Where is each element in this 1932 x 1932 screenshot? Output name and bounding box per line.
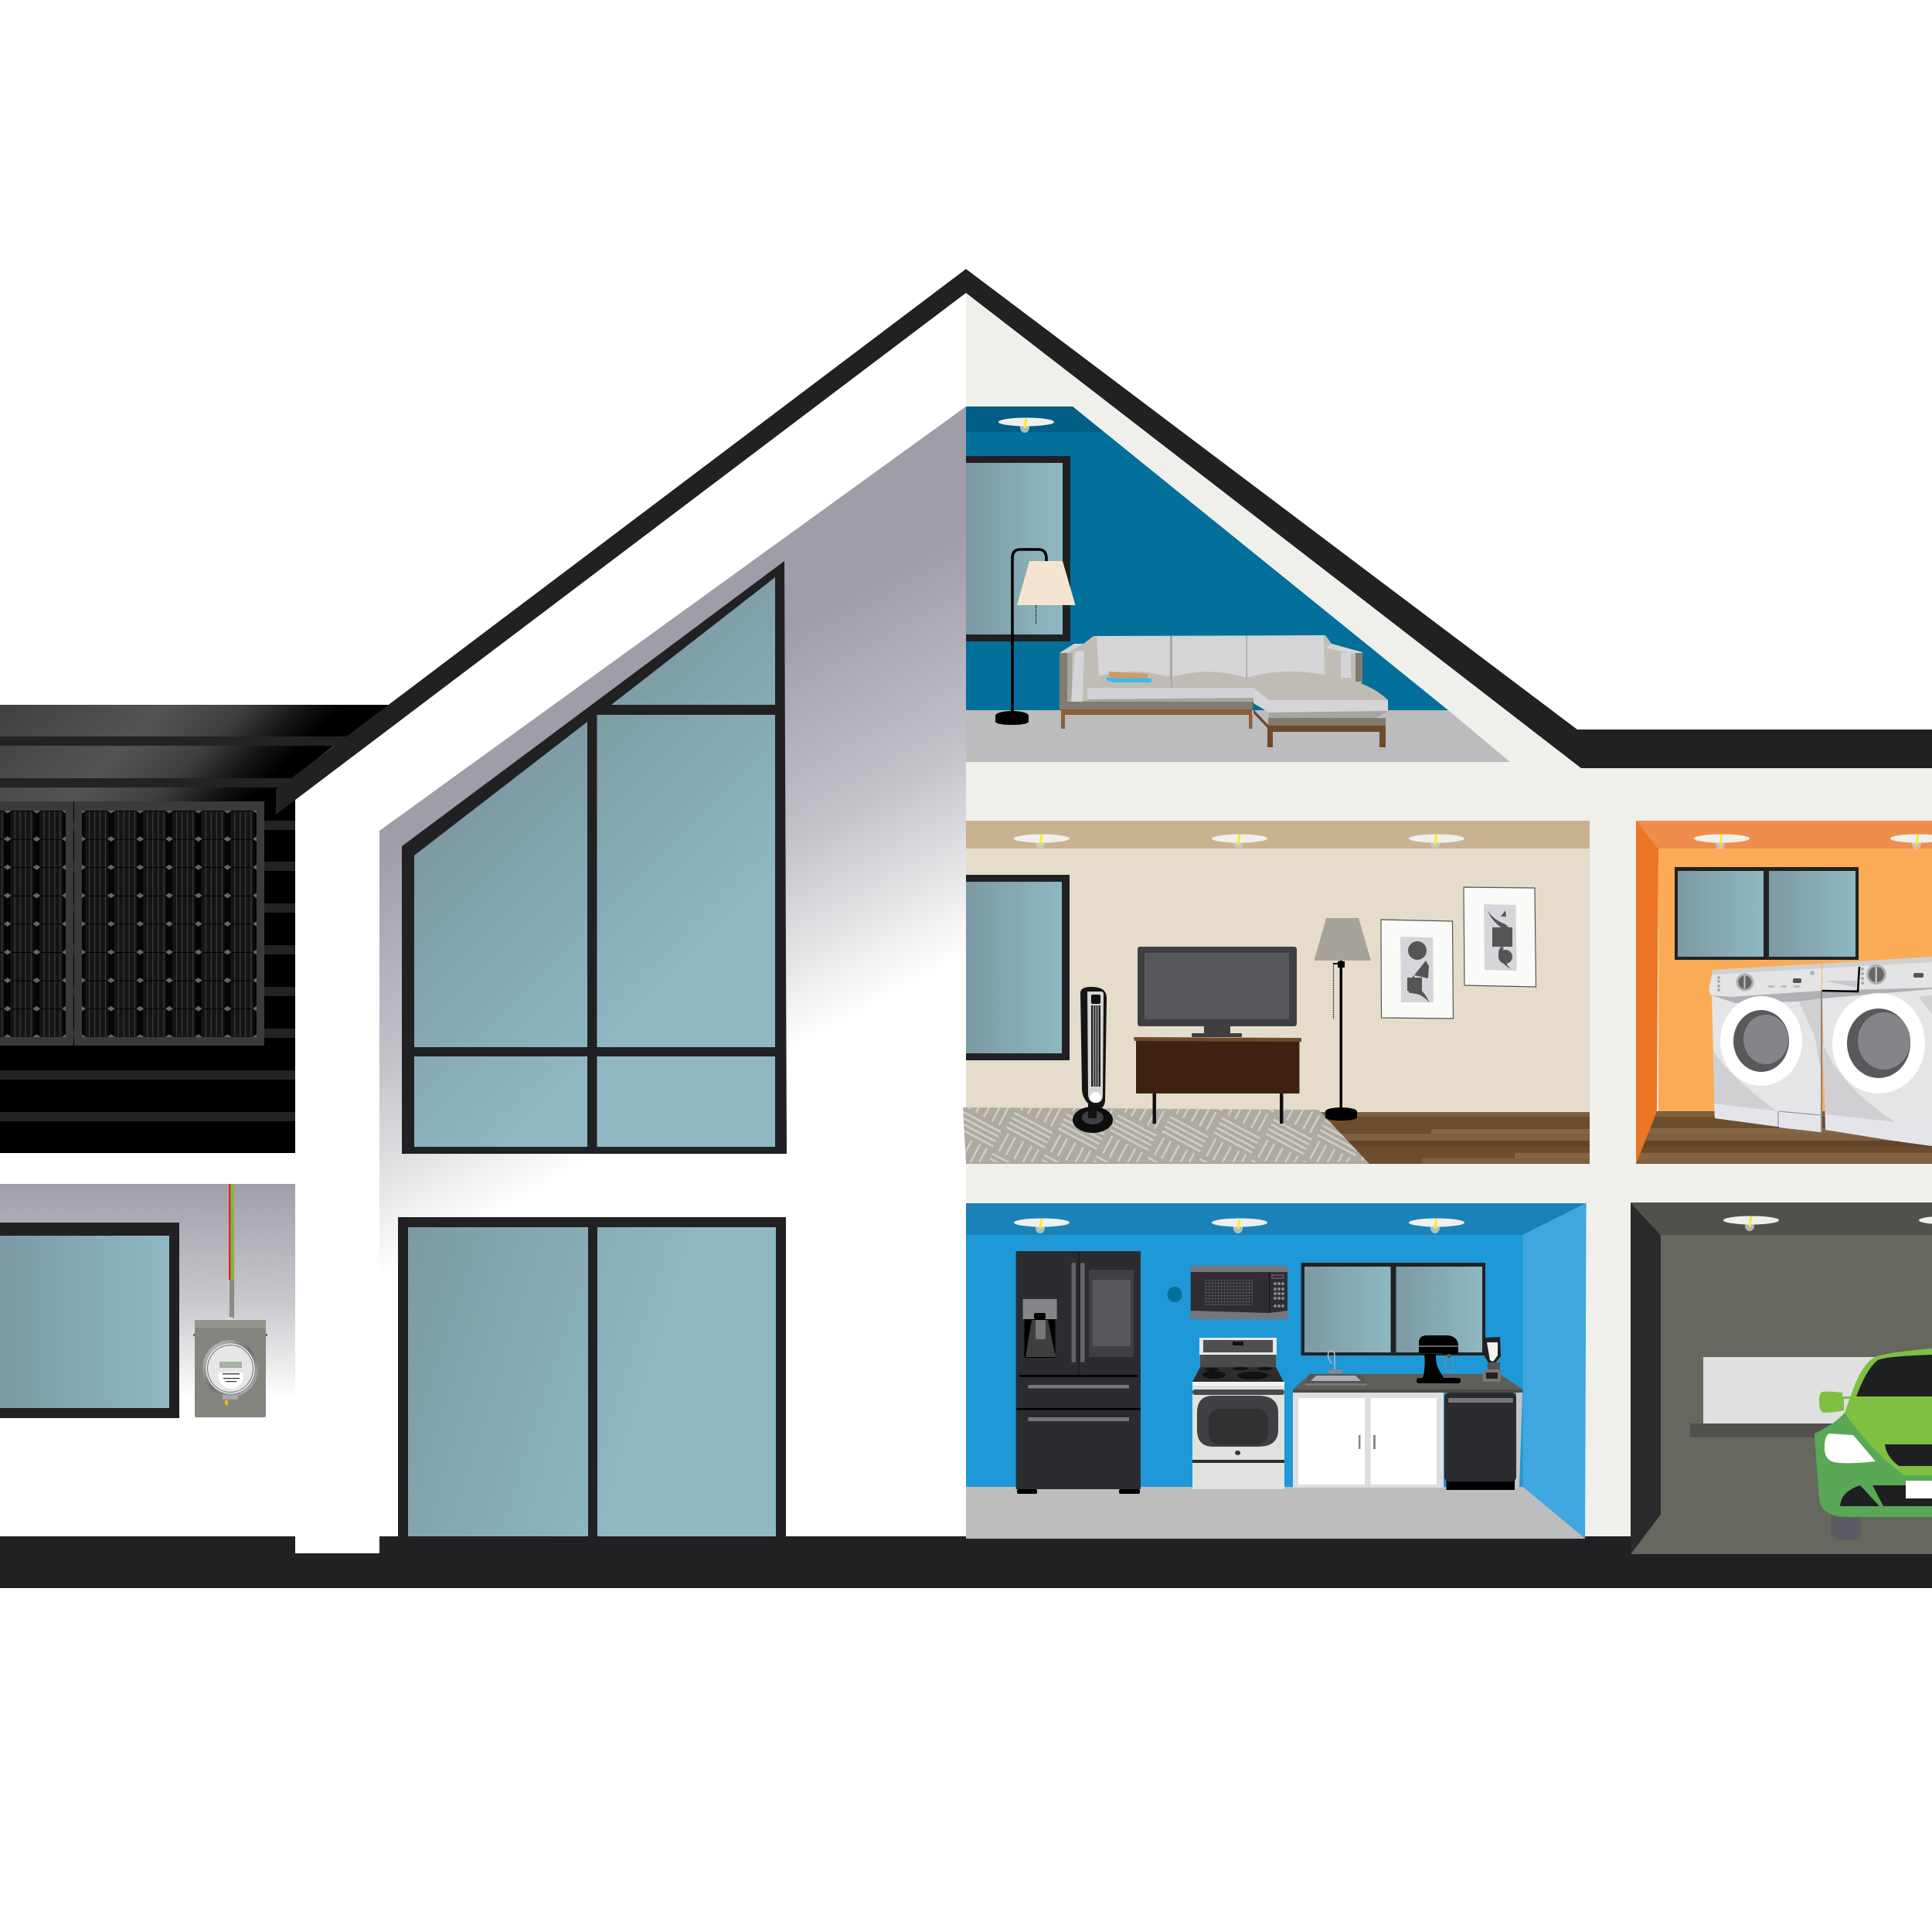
siding: black wall with strips [0,801,295,1153]
kitchen back wall [966,1235,1523,1487]
sofa front seat [1087,688,1253,699]
laundry ceiling [1636,821,1932,849]
upper big window [402,561,787,1154]
laundry window [1675,867,1859,960]
room: attic living room [966,406,1510,762]
car upper body [1845,1349,1932,1478]
solar panel left [0,801,73,1046]
books [1109,672,1148,679]
car tire [1831,1507,1861,1540]
microwave [1191,1266,1287,1319]
room: laundry [1636,821,1932,1164]
stand mixer [1417,1335,1461,1383]
sofa seat mounds [1096,672,1171,688]
right house body [966,293,1932,1553]
door pane left [408,1227,588,1536]
living window [966,875,1070,1060]
living wall [966,849,1590,1112]
kitchen cabinet [1293,1393,1444,1488]
sofa base [1060,702,1253,709]
garage ceiling [1631,1202,1932,1235]
room: kitchen [966,1203,1587,1539]
attic light [998,417,1054,433]
kitchen ceiling [966,1203,1587,1235]
kitchen floor [966,1487,1585,1539]
kitchen window [1301,1263,1485,1355]
lower left grey wall [0,1184,295,1408]
garage shelf [1690,1357,1932,1437]
sofa back frame [1060,635,1362,702]
blender [1483,1337,1501,1382]
picture left [1381,920,1453,1019]
sofa back cushions [1097,636,1170,676]
living wood floor [1314,1112,1590,1164]
laundry back wall [1658,849,1932,1111]
sofa right arm [1326,644,1362,654]
attic window [966,456,1070,641]
attic floor lamp [995,549,1076,725]
fridge [1016,1251,1141,1494]
chaise top [1247,672,1388,700]
tower fan [1073,987,1113,1133]
car hood grille [1885,1444,1932,1466]
washer [1709,964,1822,1132]
outlet dot [1167,1287,1182,1302]
laundry left wall [1636,821,1658,1164]
rug [963,1107,1369,1164]
pane: left tall [414,722,587,1047]
car [1815,1349,1932,1540]
pane: right tall [597,715,775,1047]
car headlight [1825,1434,1876,1463]
electric meter [193,1184,267,1417]
living floor lamp [1314,918,1371,1121]
living ceiling band [966,821,1590,849]
solar panel right [74,801,264,1046]
attic floor [966,710,1510,762]
laundry floor [1636,1111,1932,1164]
chaise front [1253,688,1388,713]
car number plate grille [1872,1485,1932,1506]
car lower bumper [1815,1413,1932,1517]
foundation [0,1536,1932,1588]
sofa [1060,635,1388,747]
attic ceiling band [966,406,1104,432]
tv [1138,947,1297,1037]
tv console [1134,1037,1301,1124]
stove [1192,1338,1284,1489]
pane: lower left [414,1056,587,1147]
kitchen right wall [1522,1203,1587,1539]
attic wall [966,406,1448,710]
garage left wall [1631,1202,1661,1554]
countertop [1293,1374,1522,1393]
laundry lights [1694,835,1932,849]
sliding door [398,1217,786,1536]
dishwasher [1444,1393,1522,1490]
sink [1305,1351,1367,1386]
left interior wall with gradient [379,406,966,1536]
garage lights [1723,1216,1932,1231]
roof line and eave [276,269,1932,815]
room: living room [963,821,1590,1164]
door pane right [597,1227,776,1536]
car windshield [1856,1355,1932,1396]
living lights [1014,835,1464,849]
car fog lamp [1840,1485,1879,1506]
pane: top triangle [611,577,775,705]
pane: lower right [597,1056,775,1147]
lower left window [0,1223,179,1418]
dryer [1822,957,1932,1146]
garage back wall and floor [1631,1235,1932,1554]
room: garage [1631,1202,1932,1554]
kitchen lights [1014,1218,1464,1233]
solar roof side [0,705,389,801]
picture right [1464,887,1536,987]
car plate [1906,1481,1932,1498]
sofa left arm [1060,644,1083,653]
car side mirror [1819,1392,1851,1413]
